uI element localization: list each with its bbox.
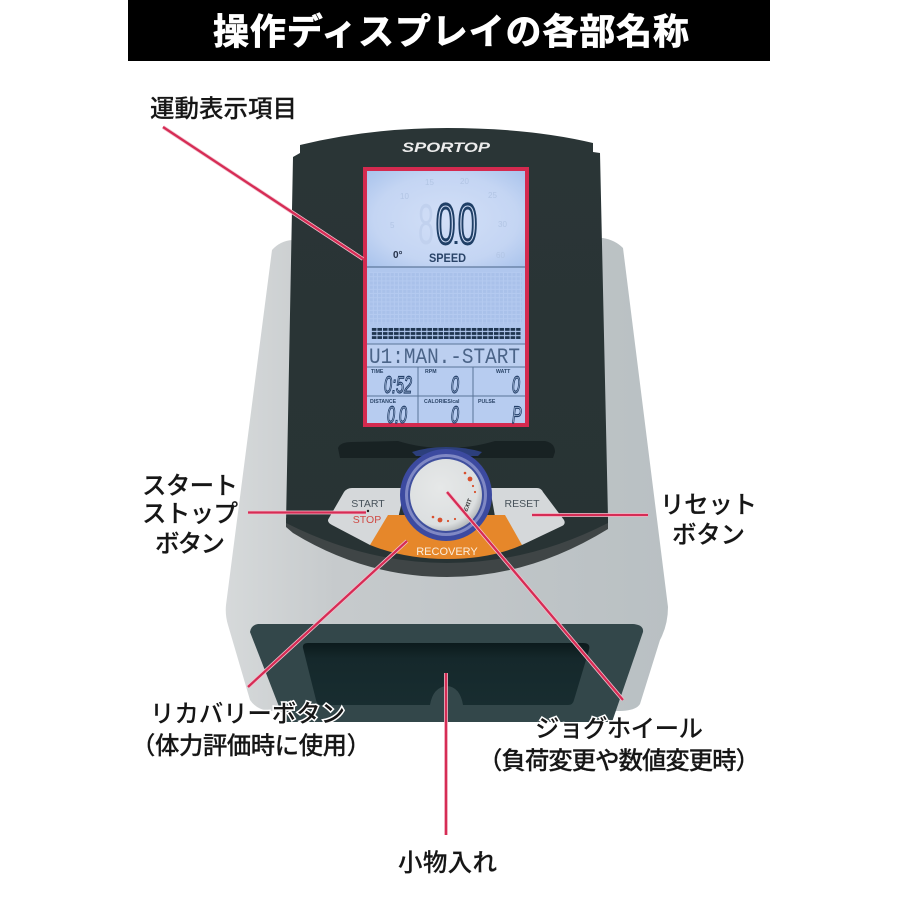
recovery button: [370, 515, 522, 559]
leader lines: [163, 127, 648, 835]
speed gauge area: [367, 171, 525, 267]
title bar: [128, 0, 770, 61]
speed gauge area: 25: [488, 191, 497, 200]
reset button: RESET: [504, 498, 540, 510]
jog wheel: EXIT: [463, 498, 474, 513]
jog wheel: [400, 449, 492, 541]
label: start stop button: スタート: [142, 472, 238, 500]
watt cell: 0: [512, 372, 520, 399]
label: recovery button: リカバリーボタン: [150, 700, 345, 728]
speed gauge area: 15: [425, 178, 434, 187]
speed gauge area: 5: [390, 221, 395, 230]
distance cell: [370, 399, 407, 429]
pulse cell: PULSE: [478, 399, 496, 405]
distance cell: DISTANCE: [370, 399, 397, 405]
speed value: 0: [458, 193, 477, 256]
title: 操作ディスプレイの各部名称: [213, 11, 689, 52]
brand logo: SPORTOP: [402, 139, 491, 155]
time cell: [371, 369, 412, 399]
watt cell: [496, 369, 520, 399]
grey housing: [226, 238, 668, 711]
rpm cell: RPM: [425, 369, 437, 375]
start stop button: [328, 488, 405, 545]
reset button: [490, 488, 565, 545]
calories cell: 0: [451, 402, 459, 429]
calories cell: CALORIES/cal: [424, 399, 460, 405]
distance cell: 0.0: [387, 402, 407, 429]
label: storage tray: 小物入れ: [398, 849, 497, 877]
speed gauge area: 8: [418, 192, 434, 257]
calories cell: [424, 399, 460, 429]
start stop button: STOP: [353, 514, 381, 526]
label: start stop button: ボタン: [155, 530, 225, 558]
tray recess: [303, 643, 589, 705]
jog wheel slot: [338, 441, 555, 458]
rpm cell: 0: [451, 372, 459, 399]
label: reset button: ボタン: [672, 521, 745, 549]
label: start stop button: ストップ: [142, 500, 238, 528]
time cell: TIME: [371, 369, 384, 375]
label: jog wheel: ジョグホイール: [535, 715, 703, 743]
storage tray: [250, 624, 643, 722]
label: reset button: [660, 492, 757, 549]
label: recovery button: （体力評価時に使用）: [131, 732, 371, 760]
label: reset button: リセット: [660, 492, 757, 519]
LCD screen: [363, 167, 529, 429]
label: start stop button: [142, 472, 238, 558]
speed gauge area: 20: [460, 177, 469, 186]
speed value: 0: [436, 193, 455, 256]
console photo: [226, 128, 668, 722]
watt cell: WATT: [496, 369, 511, 375]
start stop button: START: [351, 498, 385, 510]
display panel: [286, 128, 608, 563]
label: exercise display items: 運動表示項目: [150, 95, 297, 123]
pulse cell: P: [512, 402, 522, 429]
speed gauge area: 60: [496, 251, 505, 260]
rpm cell: [425, 369, 459, 399]
speed gauge area: 0°: [393, 250, 403, 261]
time cell: 0:52: [384, 372, 412, 399]
speed gauge area: SPEED: [429, 253, 466, 265]
speed value: [436, 193, 477, 256]
recovery button: RECOVERY: [416, 546, 478, 558]
label: jog wheel: [478, 715, 760, 775]
speed gauge area: 30: [498, 220, 507, 229]
pulse cell: [478, 399, 522, 429]
program text: U1:MAN.-START: [369, 345, 520, 370]
speed gauge area: 10: [400, 192, 409, 201]
label: recovery button: [131, 700, 371, 760]
dot matrix chart: [367, 267, 525, 344]
label: jog wheel: （負荷変更や数値変更時）: [478, 747, 760, 775]
display panel lip: [286, 518, 608, 577]
